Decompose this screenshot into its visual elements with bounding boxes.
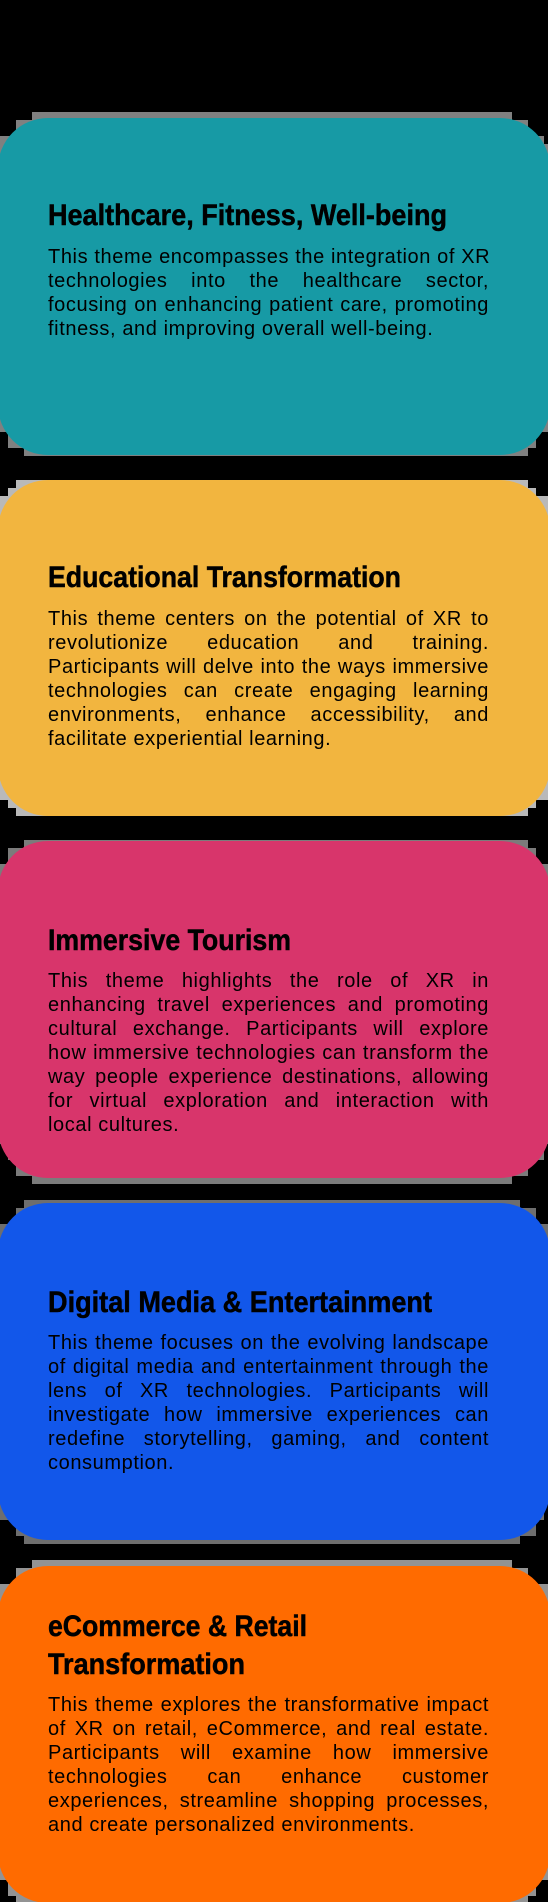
heading: Digital Media & Entertainment: Digital Media & Entertainment bbox=[48, 1286, 432, 1319]
text block: tourism description bbox=[48, 970, 489, 1136]
panel: Immersive Tourism bbox=[0, 840, 548, 1184]
text block: tourism description: local cultures. bbox=[48, 1114, 179, 1136]
text block: education description: revolutionize education and training. bbox=[48, 632, 489, 654]
text block: eCommerce description: This theme explores the transformative impact bbox=[48, 1694, 489, 1716]
panel: Educational Transformation bbox=[0, 480, 548, 816]
text block: education description: Participants will delve into the ways immersive bbox=[48, 656, 489, 678]
panel: Digital Media & Entertainment bbox=[0, 1200, 548, 1544]
heading: eCommerce & Retail Transformation bbox=[48, 1610, 307, 1681]
heading: eCommerce & Retail Transformation: Transformation bbox=[48, 1648, 245, 1681]
text block: digital media description bbox=[48, 1332, 489, 1474]
text block: tourism description: This theme highlights the role of XR in bbox=[48, 970, 489, 992]
heading: Healthcare, Fitness, Well-being: Healthcare, Fitness, Well-being bbox=[48, 199, 447, 232]
text block: healthcare description: technologies into the healthcare sector, bbox=[48, 270, 489, 292]
text block: education description: facilitate experiential learning. bbox=[48, 728, 331, 750]
text block: tourism description: for virtual exploration and interaction with bbox=[48, 1090, 489, 1112]
text block: digital media description: lens of XR technologies. Participants will bbox=[48, 1380, 489, 1402]
text block: tourism description: enhancing travel experiences and promoting bbox=[48, 994, 489, 1016]
text block: eCommerce description bbox=[48, 1694, 489, 1836]
text block: digital media description: This theme focuses on the evolving landscape bbox=[48, 1332, 489, 1354]
text block: healthcare description bbox=[48, 246, 490, 340]
heading: Immersive Tourism: Immersive Tourism bbox=[48, 924, 291, 957]
text block: tourism description: how immersive technologies can transform the bbox=[48, 1042, 489, 1064]
text block: healthcare description: focusing on enhancing patient care, promoting bbox=[48, 294, 489, 316]
text block: digital media description: investigate how immersive experiences can bbox=[48, 1404, 489, 1426]
text block: digital media description: consumption. bbox=[48, 1452, 174, 1474]
text block: eCommerce description: Participants will examine how immersive bbox=[48, 1742, 489, 1764]
panel: eCommerce & Retail Transformation bbox=[0, 1560, 548, 1902]
text block: education description: This theme centers on the potential of XR to bbox=[48, 608, 489, 630]
text block: tourism description: way people experience destinations, allowing bbox=[48, 1066, 489, 1088]
text block: education description: technologies can create engaging learning bbox=[48, 680, 489, 702]
text block: tourism description: cultural exchange. Participants will explore bbox=[48, 1018, 489, 1040]
heading: Educational Transformation: Educational Transformation bbox=[48, 561, 401, 594]
text block: healthcare description: This theme encompasses the integration of XR bbox=[48, 246, 490, 268]
text block: digital media description: of digital media and entertainment through the bbox=[48, 1356, 489, 1378]
text block: eCommerce description: of XR on retail, eCommerce, and real estate. bbox=[48, 1718, 489, 1740]
panel: Healthcare, Fitness, Well-being bbox=[0, 112, 548, 456]
text block: eCommerce description: and create personalized environments. bbox=[48, 1814, 415, 1836]
text block: digital media description: redefine storytelling, gaming, and content bbox=[48, 1428, 489, 1450]
text block: healthcare description: fitness, and improving overall well-being. bbox=[48, 318, 433, 340]
text block: education description: environments, enhance accessibility, and bbox=[48, 704, 489, 726]
text block: eCommerce description: experiences, streamline shopping processes, bbox=[48, 1790, 489, 1812]
text block: education description bbox=[48, 608, 489, 750]
text block: eCommerce description: technologies can enhance customer bbox=[48, 1766, 489, 1788]
heading: eCommerce & Retail Transformation: eCommerce & Retail bbox=[48, 1610, 307, 1643]
